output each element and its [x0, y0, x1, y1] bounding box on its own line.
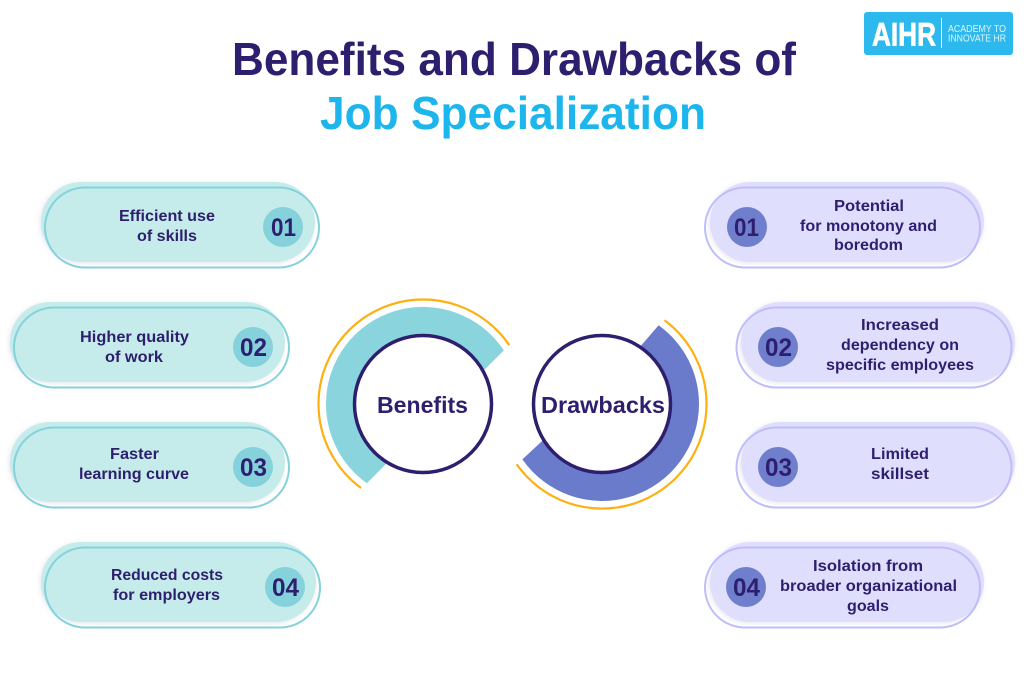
benefit pill 02 [10, 302, 289, 388]
benefit pill 02: Higher quality [80, 329, 189, 346]
drawback pill 02: dependency on [841, 337, 959, 354]
benefit pill 02: of work [105, 349, 163, 366]
drawback pill 04 [705, 542, 984, 628]
benefit pill 01 [41, 182, 319, 268]
logo: AIHR [864, 12, 1013, 55]
benefit pill 03 [10, 422, 289, 508]
title [232, 33, 797, 139]
benefit pill 03: Faster [110, 446, 159, 463]
drawback pill 02: specific employees [826, 357, 974, 374]
drawback pill 04: broader organizational [780, 578, 957, 595]
logo: AIHR: INNOVATE HR [948, 34, 1006, 44]
logo: AIHR: AIHR [872, 16, 936, 52]
benefit pill 04: for employers [113, 587, 220, 604]
drawback pill 01: 01 [734, 214, 759, 242]
benefit pill 04: 04 [272, 574, 299, 602]
drawback pill 03: 03 [765, 454, 792, 482]
benefit pill 03: 03 [240, 454, 267, 482]
drawback pill 02 [736, 302, 1015, 388]
drawback pill 01 [705, 182, 984, 268]
drawback pill 01: boredom [834, 237, 903, 254]
benefit pill 01: of skills [137, 228, 197, 245]
drawback pill 03 [736, 422, 1015, 508]
title: Job Specialization [320, 87, 706, 139]
benefit pill 01: 01 [271, 214, 296, 242]
logo: AIHR: ACADEMY TO [948, 24, 1006, 35]
drawback pill 01: for monotony and [800, 218, 937, 235]
benefit pill 04: Reduced costs [111, 567, 223, 584]
drawback pill 01: Potential [834, 198, 904, 215]
benefits circle: Benefits [377, 392, 468, 418]
title: Benefits and Drawbacks of [232, 33, 797, 85]
drawback pill 04: 04 [733, 574, 760, 602]
benefit pill 04 [41, 542, 320, 628]
drawbacks circle [517, 320, 706, 509]
drawback pill 03: Limited [871, 446, 929, 463]
drawback pill 03: skillset [871, 466, 930, 483]
benefit pill 01: Efficient use [119, 208, 215, 225]
drawback pill 04: Isolation from [813, 558, 923, 575]
drawback pill 02: 02 [765, 334, 792, 362]
benefit pill 03: learning curve [79, 466, 189, 483]
drawback pill 04: goals [847, 598, 889, 615]
drawback pill 02: Increased [861, 317, 939, 334]
benefits circle [318, 300, 509, 488]
benefit pill 02: 02 [240, 334, 267, 362]
drawbacks circle: Drawbacks [541, 392, 665, 418]
